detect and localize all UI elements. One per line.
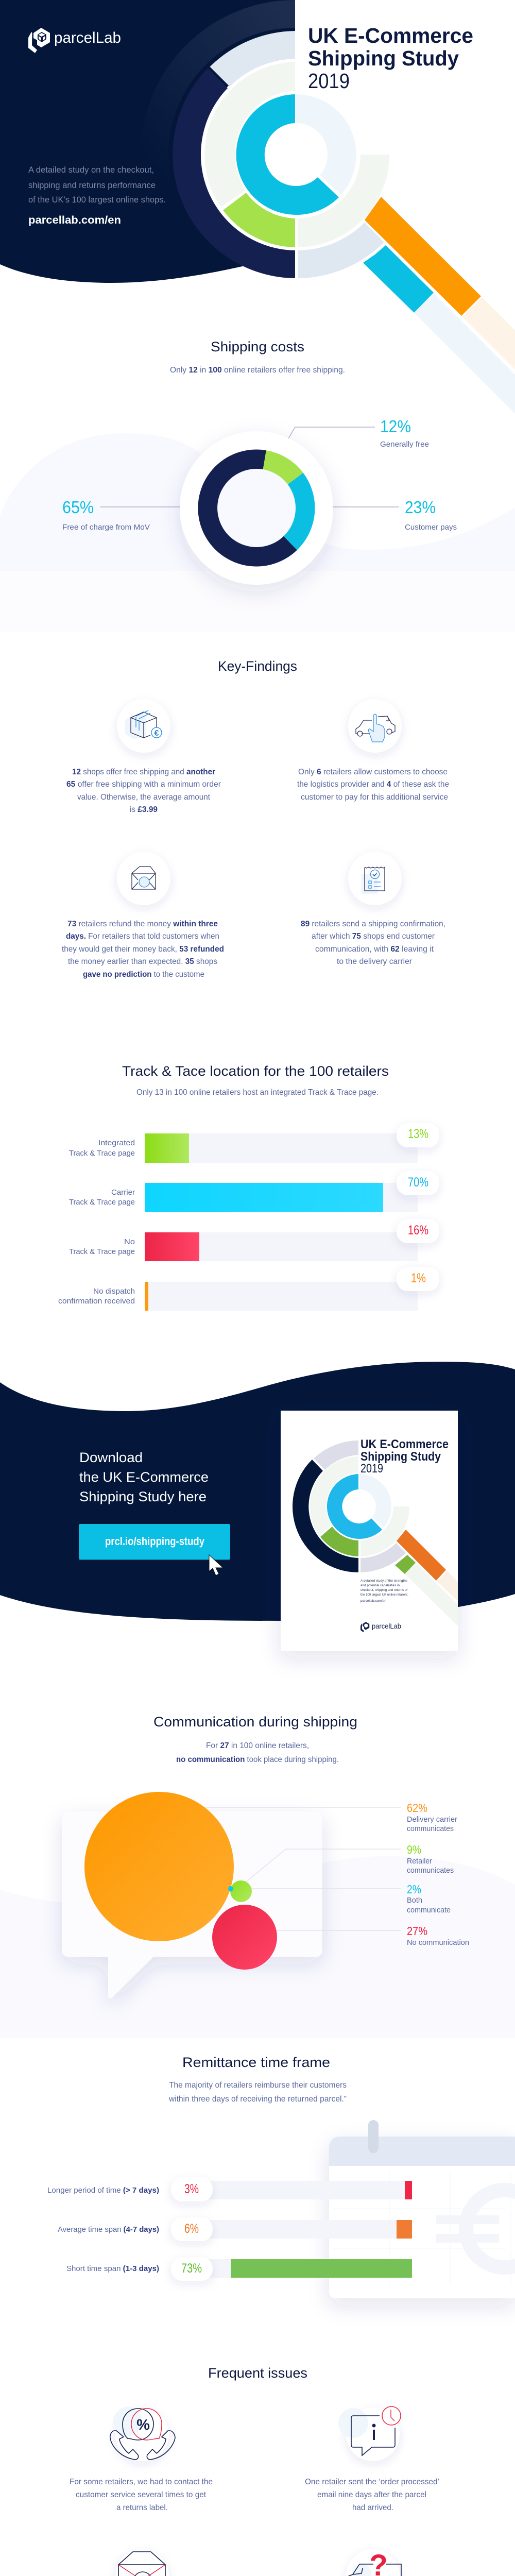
issue 4 (291, 2549, 453, 2576)
issue text: customer service several times to get (76, 2490, 207, 2499)
study title: 2019 (308, 69, 350, 93)
hero description (28, 165, 166, 205)
icon: receipt with check (348, 852, 402, 905)
leader lines (200, 1807, 401, 1930)
icon: envelope with return arrow (117, 852, 170, 905)
finding text: the logistics provider and 4 of these ask the (297, 780, 449, 789)
subheading: no communication took place during shipping. (176, 1755, 339, 1764)
cover title (360, 1437, 449, 1476)
bar longer period: 3% (184, 2182, 199, 2196)
hero url: parcellab.com/en (28, 214, 121, 226)
label 62 percent (407, 1801, 457, 1833)
cover description: and potential capabilities in (360, 1584, 400, 1587)
section: frequent issues (62, 2365, 453, 2576)
finding 1 (66, 699, 221, 814)
icon: parcel with euro (117, 699, 170, 753)
label 27 percent: No communication (407, 1938, 469, 1947)
finding text: to the delivery carrier (337, 957, 413, 966)
label 12 percent: 12% (380, 417, 411, 436)
heading: Remittance time frame (182, 2055, 330, 2070)
bar chart (58, 1123, 439, 1311)
section: key findings (62, 658, 449, 979)
download button: prcl.io/shipping-study (105, 1535, 205, 1548)
bar no dispatch: No dispatch (93, 1287, 135, 1296)
bar no track page (69, 1219, 439, 1261)
finding text: after which 75 shops end customer (312, 932, 435, 941)
study title (308, 24, 473, 93)
bar carrier: Track & Trace page (69, 1198, 135, 1207)
issue text (70, 2478, 213, 2512)
cover logo (360, 1622, 401, 1632)
calendar illustration (329, 2120, 515, 2298)
label 27 percent (407, 1924, 469, 1947)
icon: parcel with euro: € (154, 729, 159, 738)
bar average: Average time span (4-7 days) (58, 2225, 159, 2234)
finding 2 (297, 699, 449, 802)
label 9 percent (407, 1843, 454, 1875)
cover description: A detailed study of the strengths (360, 1580, 407, 1583)
bar integrated: Integrated (98, 1139, 135, 1147)
heading: Track & Tace location for the 100 retailers (122, 1063, 389, 1079)
issue 2 (305, 2406, 439, 2512)
heading: Communication during shipping (153, 1714, 357, 1730)
label 12 percent (380, 417, 429, 449)
finding text: 65 offer free shipping with a minimum order (66, 780, 221, 789)
issue 3 (62, 2549, 220, 2576)
label 62 percent: communicates (407, 1824, 454, 1833)
hero description: A detailed study on the checkout, (28, 165, 154, 175)
label 2 percent: communicate (407, 1906, 451, 1914)
cover chart (293, 1440, 458, 1626)
finding text: customer to pay for this additional service (301, 793, 448, 802)
issue text: had arrived. (352, 2503, 393, 2512)
bar short: Short time span (1-3 days) (66, 2264, 159, 2273)
cover description: parcellab.com/en (360, 1600, 386, 1603)
pale background wave (0, 1856, 515, 2038)
icon: crossed envelope (115, 2549, 169, 2576)
label 65 percent (62, 498, 150, 532)
issue text: For some retailers, we had to contact the (70, 2478, 213, 2486)
euro symbol (436, 2183, 515, 2275)
call to action heading: the UK E-Commerce (79, 1469, 209, 1485)
bar longer period: Longer period of time (> 7 days) (47, 2186, 159, 2195)
finding text (66, 768, 221, 814)
call to action heading (79, 1450, 209, 1504)
bar no dispatch (58, 1267, 439, 1311)
finding text: gave no prediction to the custome (83, 970, 204, 979)
cover logo: parcelLab (372, 1622, 401, 1630)
finding text (301, 920, 445, 966)
hero description: shipping and returns performance (28, 180, 156, 190)
cover description: checkout, shipping and returns of (360, 1589, 407, 1592)
label 27 percent: 27% (407, 1924, 427, 1938)
finding text: the money earlier than expected. 35 shops (68, 957, 217, 966)
bar chart (47, 2177, 412, 2281)
label 9 percent: 9% (407, 1843, 421, 1856)
finding text: is £3.99 (130, 805, 158, 814)
label 23 percent (405, 498, 457, 532)
finding text: 12 shops offer free shipping and another (72, 768, 215, 776)
download button (79, 1524, 230, 1560)
bar short (66, 2257, 412, 2281)
icon: info bubble and clock (338, 2406, 401, 2461)
label 62 percent: Delivery carrier (407, 1815, 457, 1824)
subheading: within three days of receiving the returned parcel.” (168, 2095, 347, 2104)
section: download (0, 1362, 515, 1651)
finding text: communication, with 62 leaving it (315, 945, 434, 954)
bar no track page: No (124, 1238, 135, 1246)
hero magnifier chart (173, 31, 515, 414)
finding 4 (301, 852, 445, 966)
finding text: value. Otherwise, the average amount (77, 793, 211, 802)
label 23 percent: Customer pays (405, 523, 457, 532)
issue 1 (70, 2407, 213, 2512)
cover title: UK E-Commerce (360, 1437, 449, 1451)
label 2 percent: Both (407, 1896, 422, 1905)
leader lines (100, 427, 399, 507)
label 23 percent: 23% (405, 498, 436, 517)
bar carrier (69, 1171, 439, 1212)
label 9 percent: communicates (407, 1866, 454, 1875)
pale lower band (0, 571, 515, 632)
subheading: For 27 in 100 online retailers, (206, 1741, 309, 1750)
label 65 percent: Free of charge from MoV (62, 523, 150, 532)
bar average: 6% (184, 2222, 199, 2236)
bar average (58, 2217, 412, 2241)
subheading: The majority of retailers reimburse their customers (169, 2081, 347, 2090)
cover title: Shipping Study (360, 1450, 441, 1464)
cover description (360, 1580, 408, 1603)
cover description: the 100 largest UK online retailers. (360, 1594, 408, 1597)
bar no dispatch: confirmation received (58, 1297, 135, 1306)
bar integrated: 13% (408, 1127, 428, 1141)
heading: Key-Findings (218, 658, 297, 674)
bar longer period (47, 2177, 412, 2201)
finding text: 89 retailers send a shipping confirmation, (301, 920, 445, 928)
dark wave background (0, 1362, 515, 1621)
speech bubble (62, 1811, 322, 1998)
book cover (281, 1411, 458, 1651)
bar short: 73% (181, 2261, 202, 2276)
bar carrier: 70% (408, 1175, 428, 1190)
icon: phones and percent bubble: % (136, 2417, 150, 2433)
subheading: Only 12 in 100 online retailers offer free shipping. (170, 366, 345, 375)
issue text (305, 2478, 439, 2512)
hero description: of the UK’s 100 largest online shops. (28, 195, 166, 205)
heading: Shipping costs (211, 339, 304, 354)
bar integrated (69, 1123, 439, 1163)
pale background wave (0, 433, 515, 571)
bar integrated: Track & Trace page (69, 1149, 135, 1158)
icon: cars and hand (348, 699, 402, 753)
finding 3 (62, 852, 224, 979)
study title: UK E-Commerce (308, 24, 473, 47)
label 9 percent: Retailer (407, 1857, 432, 1866)
section: track and trace (58, 1063, 439, 1311)
finding text: Only 6 retailers allow customers to choose (298, 768, 448, 776)
icon: mouse cursor (209, 1555, 223, 1575)
label 2 percent (407, 1883, 451, 1914)
finding text: days. For retailers that told customers when (66, 932, 219, 941)
finding text (297, 768, 449, 802)
logo parcelLab: parcelLab (54, 29, 121, 46)
bar no track page: 16% (408, 1223, 428, 1238)
section: communication (0, 1714, 515, 2038)
section: remittance (47, 2055, 515, 2298)
label 2 percent: 2% (407, 1883, 421, 1896)
donut chart (180, 431, 333, 585)
label 62 percent: 62% (407, 1801, 427, 1815)
call to action heading: Shipping Study here (79, 1489, 207, 1504)
finding text: they would get their money back, 53 refunded (62, 945, 224, 954)
study title: Shipping Study (308, 46, 459, 70)
icon: phones and percent bubble (110, 2407, 175, 2461)
label 65 percent: 65% (62, 498, 94, 517)
finding text: 73 retailers refund the money within three (67, 920, 218, 928)
bar no dispatch: 1% (411, 1271, 426, 1285)
issue text: One retailer sent the ‘order processed’ (305, 2478, 439, 2486)
heading: Frequent issues (208, 2365, 307, 2381)
hero panel (0, 0, 515, 414)
call to action heading: Download (79, 1450, 143, 1465)
icon: van with question mark (344, 2549, 401, 2576)
hero dark background with wave (0, 0, 295, 295)
subheading (176, 1741, 339, 1764)
issue text: a returns label. (116, 2503, 168, 2512)
cover title: 2019 (360, 1462, 383, 1476)
subheading (168, 2081, 347, 2104)
bubble chart (84, 1792, 277, 1970)
finding text (62, 920, 224, 979)
section: shipping costs (0, 339, 515, 632)
logo parcelLab (28, 28, 121, 53)
issue text: email nine days after the parcel (317, 2490, 426, 2499)
bar carrier: Carrier (111, 1188, 135, 1197)
subheading: Only 13 in 100 online retailers host an integrated Track & Trace page. (136, 1088, 379, 1097)
bar no track page: Track & Trace page (69, 1247, 135, 1256)
label 12 percent: Generally free (380, 440, 429, 449)
